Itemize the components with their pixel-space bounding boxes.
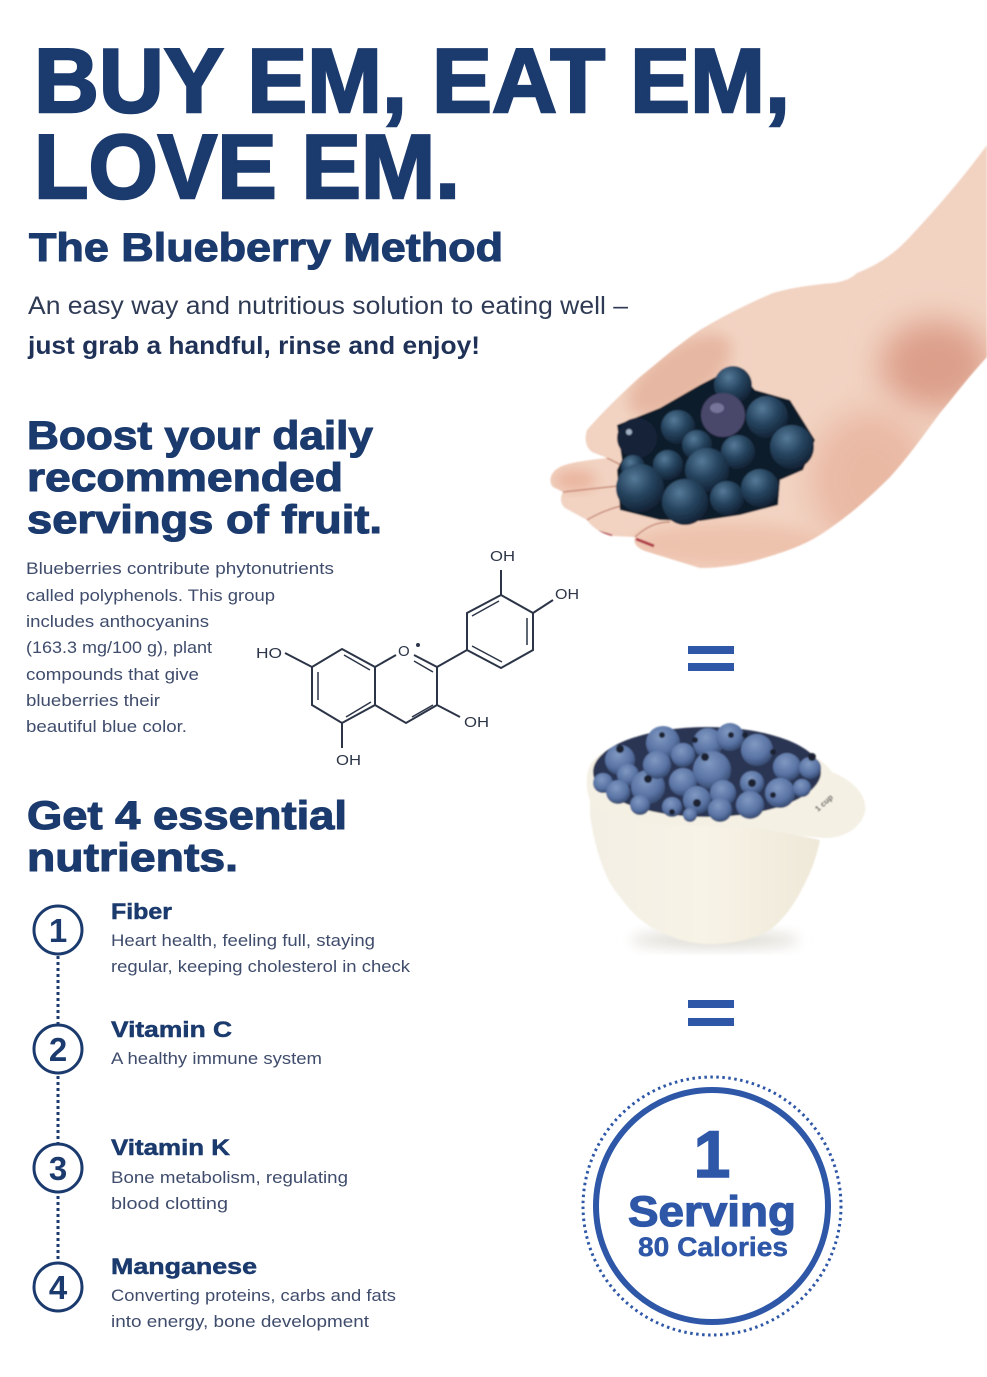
equals sign [688, 1000, 734, 1026]
chart: anthocyanin molecule: HO [256, 645, 282, 662]
title: LOVE EM. [34, 117, 460, 218]
finger creases [563, 458, 670, 537]
nutrient 4: manganese: Converting proteins, carbs and fats [111, 1286, 396, 1305]
list: nutrients [34, 899, 411, 1331]
badge: 1 serving 80 calories: Serving [628, 1188, 796, 1236]
chart: anthocyanin molecule: OH [336, 752, 361, 769]
title [34, 31, 790, 218]
bowl [590, 790, 820, 944]
text block: polyphenols: blueberries their [26, 691, 160, 710]
nutrient 1: fiber: regular, keeping cholesterol in check [111, 957, 411, 976]
nutrient 1: fiber: 1 [49, 912, 67, 949]
title: BUY EM, EAT EM, [34, 31, 790, 132]
nutrient 3: vitamin K [34, 1135, 348, 1213]
heading: essential nutrients: Get 4 essential [27, 794, 347, 838]
chart: anthocyanin molecule: OH [555, 586, 579, 603]
intro text: just grab a handful, rinse and enjoy! [27, 332, 480, 360]
hand [540, 130, 987, 580]
photo: cup of blueberries [587, 723, 865, 948]
nutrient 3: vitamin K: blood clotting [111, 1194, 228, 1213]
text block: polyphenols: includes anthocyanins [26, 612, 209, 631]
text block: polyphenols: Blueberries contribute phytonutrients [26, 559, 334, 578]
badge: 1 serving 80 calories: 80 Calories [638, 1232, 788, 1262]
nutrient 3: vitamin K: Bone metabolism, regulating [111, 1168, 348, 1187]
blueberries in palm [616, 366, 815, 525]
nutrient 3: vitamin K: Vitamin K [111, 1135, 230, 1160]
nutrient 4: manganese: into energy, bone development [111, 1312, 369, 1331]
text block: polyphenols: beautiful blue color. [26, 717, 187, 736]
heading: essential nutrients [27, 794, 347, 880]
badge: 1 serving 80 calories: 1 [694, 1117, 730, 1191]
text block: polyphenols: (163.3 mg/100 g), plant [26, 638, 212, 657]
nutrient 2: vitamin C: 2 [49, 1031, 67, 1068]
chart: anthocyanin molecule: OH [490, 548, 515, 565]
nutrient 4: manganese [34, 1254, 396, 1331]
chart: anthocyanin molecule: O [398, 643, 410, 660]
text block: polyphenols: compounds that give [26, 665, 199, 684]
heading: boost servings: Boost your daily [27, 414, 374, 458]
nutrient 2: vitamin C [34, 1017, 322, 1073]
intro text [27, 292, 628, 360]
text block: polyphenols: called polyphenols. This group [26, 586, 275, 605]
cup label: 1 cup [813, 793, 835, 813]
chart: anthocyanin molecule [256, 548, 579, 769]
subtitle: The Blueberry Method [29, 226, 503, 270]
chart: anthocyanin molecule: OH [464, 714, 489, 731]
nutrient 4: manganese: 4 [49, 1269, 68, 1306]
nutrient 1: fiber [34, 899, 411, 976]
nail polish [592, 530, 654, 546]
nutrient 3: vitamin K: 3 [49, 1150, 67, 1187]
badge: 1 serving 80 calories [583, 1077, 841, 1335]
intro text: An easy way and nutritious solution to eating well – [28, 292, 628, 320]
heading: boost servings: recommended [27, 456, 343, 500]
blueberries in cup [593, 723, 821, 822]
nutrient 2: vitamin C: A healthy immune system [111, 1049, 322, 1068]
heading: boost servings [27, 414, 382, 542]
text block: polyphenols [26, 559, 334, 736]
equals sign [688, 646, 734, 671]
nutrient 1: fiber: Fiber [111, 899, 172, 924]
nutrient 4: manganese: Manganese [111, 1254, 257, 1279]
photo: hand holding blueberries [540, 130, 987, 580]
nutrient 2: vitamin C: Vitamin C [111, 1017, 232, 1042]
heading: essential nutrients: nutrients. [27, 836, 238, 880]
heading: boost servings: servings of fruit. [27, 498, 382, 542]
nutrient 1: fiber: Heart health, feeling full, staying [111, 931, 375, 950]
